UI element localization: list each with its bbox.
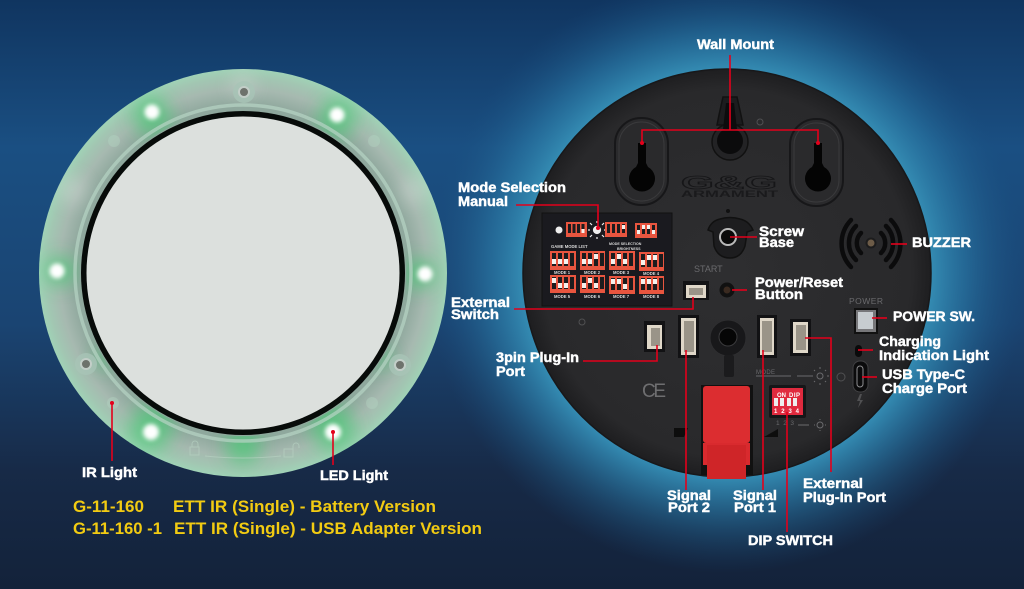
icon: power switch: POWER bbox=[849, 296, 883, 306]
icon: START port bbox=[683, 264, 723, 300]
logo bbox=[681, 173, 779, 199]
label: screw base: Base bbox=[759, 234, 794, 250]
model: usb adapter version: ETT IR (Single) - USB Adapter Version bbox=[174, 520, 482, 538]
manual text: MODE 8 bbox=[643, 294, 660, 299]
label: buzzer: BUZZER bbox=[912, 234, 971, 250]
icon: right wall-mount pad bbox=[790, 119, 843, 206]
logo: G&G bbox=[681, 173, 777, 193]
model: battery version: ETT IR (Single) - Battery Version bbox=[173, 498, 436, 516]
label: power reset button bbox=[755, 274, 843, 302]
label: ir light: IR Light bbox=[82, 464, 137, 480]
label: usb type-c charge port bbox=[882, 366, 967, 396]
green LED glow bbox=[45, 97, 435, 464]
label: screw base: Screw bbox=[759, 223, 804, 239]
icon: buzzer bbox=[842, 220, 900, 267]
model: battery version bbox=[73, 498, 436, 516]
icon: signal port 2 bbox=[678, 315, 699, 358]
logo: ARMAMENT bbox=[681, 189, 779, 199]
inner rim bbox=[75, 105, 411, 441]
black gasket bbox=[81, 111, 405, 435]
label: mode selection manual: Manual bbox=[458, 193, 508, 209]
manual text: GAME MODE LIST bbox=[551, 244, 588, 249]
icon: power switch bbox=[849, 296, 883, 334]
icon: lightning bbox=[857, 394, 863, 408]
translucent ring bbox=[39, 69, 447, 477]
icon: dim sun bbox=[556, 226, 562, 234]
white diffuser disc bbox=[86, 116, 400, 430]
icon: mode dip switch bbox=[756, 370, 812, 427]
model: battery version: G-11-160 bbox=[73, 498, 144, 516]
label: external switch bbox=[451, 294, 510, 322]
label: mode selection manual: Mode Selection bbox=[458, 179, 566, 195]
manual text: MODE 1 bbox=[554, 270, 571, 275]
label: charging indication light: Charging bbox=[879, 333, 941, 349]
product names bbox=[73, 498, 482, 538]
icon: 3pin port bbox=[644, 321, 665, 352]
label: power reset button: Power/Reset bbox=[755, 274, 843, 290]
icon: mode dip switch: ON bbox=[777, 393, 786, 399]
label: signal port 2: Signal bbox=[667, 487, 711, 503]
panel: mode selection manual bbox=[542, 213, 672, 306]
panel: front of target unit bbox=[39, 69, 447, 477]
callout dots bbox=[110, 141, 820, 434]
model: usb adapter version: G-11-160 -1 bbox=[73, 520, 162, 538]
icon: lower key socket bbox=[710, 320, 746, 377]
icon: left wall-mount pad bbox=[615, 118, 668, 205]
manual text: MODE 5 bbox=[554, 294, 571, 299]
label: power switch: POWER SW. bbox=[893, 308, 975, 324]
label: dip switch: DIP SWITCH bbox=[748, 532, 833, 548]
icon: IR lights bbox=[107, 135, 380, 409]
label: mode selection manual bbox=[458, 179, 566, 209]
icon: LEDs bbox=[50, 104, 432, 440]
manual text: MODE SELECTION bbox=[609, 242, 642, 246]
manual text: MODE 3 bbox=[613, 270, 630, 275]
icon: red battery latch bbox=[674, 385, 778, 479]
icon: brightness suns bbox=[811, 367, 829, 431]
label: 3pin plug-in port bbox=[496, 349, 579, 379]
switch knobs bbox=[552, 225, 657, 289]
icon: mode dip switch: 1 2 3 4 bbox=[774, 409, 800, 415]
icon: mode dip switch: MODE bbox=[756, 370, 775, 376]
icon: signal port 1 bbox=[757, 315, 777, 358]
callout lines bbox=[112, 55, 907, 532]
icon: CE mark: C E bbox=[642, 381, 666, 402]
manual text: MODE 7 bbox=[613, 294, 630, 299]
label: external switch: Switch bbox=[451, 306, 499, 322]
icon: START port: START bbox=[694, 264, 723, 274]
label: signal port 2 bbox=[667, 487, 711, 515]
label: external plug-in port: Plug-In Port bbox=[803, 489, 886, 505]
icon: mode dip switch: 1 2 3 bbox=[776, 420, 794, 427]
manual text: MODE 6 bbox=[584, 294, 601, 299]
label: signal port 1 bbox=[733, 487, 777, 515]
icon: small screw hole bbox=[579, 119, 845, 381]
label: signal port 1: Port 1 bbox=[734, 499, 776, 515]
label: 3pin plug-in port: 3pin Plug-In bbox=[496, 349, 579, 365]
label: wall mount: Wall Mount bbox=[697, 36, 774, 52]
icon: bright sun bbox=[588, 221, 606, 239]
label: signal port 1: Signal bbox=[733, 487, 777, 503]
housing bbox=[523, 69, 931, 477]
icon: mode dip switch: DIP bbox=[789, 393, 800, 399]
icon: lock scale bbox=[190, 441, 299, 458]
label: external plug-in port bbox=[803, 475, 886, 505]
switch slots bbox=[552, 224, 663, 290]
label: usb type-c charge port: Charge Port bbox=[882, 380, 967, 396]
label: led light: LED Light bbox=[320, 467, 388, 483]
label: charging indication light bbox=[879, 333, 989, 363]
label: power reset button: Button bbox=[755, 286, 803, 302]
panel: back of target unit bbox=[523, 69, 931, 479]
icon: usb-c port bbox=[853, 361, 868, 392]
icon: external plug-in port bbox=[790, 319, 811, 356]
label: external plug-in port: External bbox=[803, 475, 863, 491]
label: charging indication light: Indication Light bbox=[879, 347, 989, 363]
manual text: BRIGHTNESS bbox=[617, 247, 641, 251]
manual text bbox=[551, 242, 660, 299]
label: external switch: External bbox=[451, 294, 510, 310]
icon: screws bbox=[81, 87, 405, 370]
label: 3pin plug-in port: Port bbox=[496, 363, 525, 379]
label: screw base bbox=[759, 223, 804, 250]
silver highlights bbox=[58, 73, 429, 204]
icon: screw bosses bbox=[75, 81, 411, 376]
icon: power reset button bbox=[720, 282, 734, 298]
icon: charging indicator bbox=[855, 345, 862, 357]
dip switches bbox=[550, 222, 664, 294]
manual text: MODE 2 bbox=[584, 270, 601, 275]
icon: center keyhole bbox=[712, 97, 748, 160]
labels bbox=[82, 36, 989, 548]
label: usb type-c charge port: USB Type-C bbox=[882, 366, 965, 382]
label: signal port 2: Port 2 bbox=[668, 499, 710, 515]
icon: screw base bbox=[708, 209, 753, 258]
manual text: MODE 4 bbox=[643, 271, 660, 276]
